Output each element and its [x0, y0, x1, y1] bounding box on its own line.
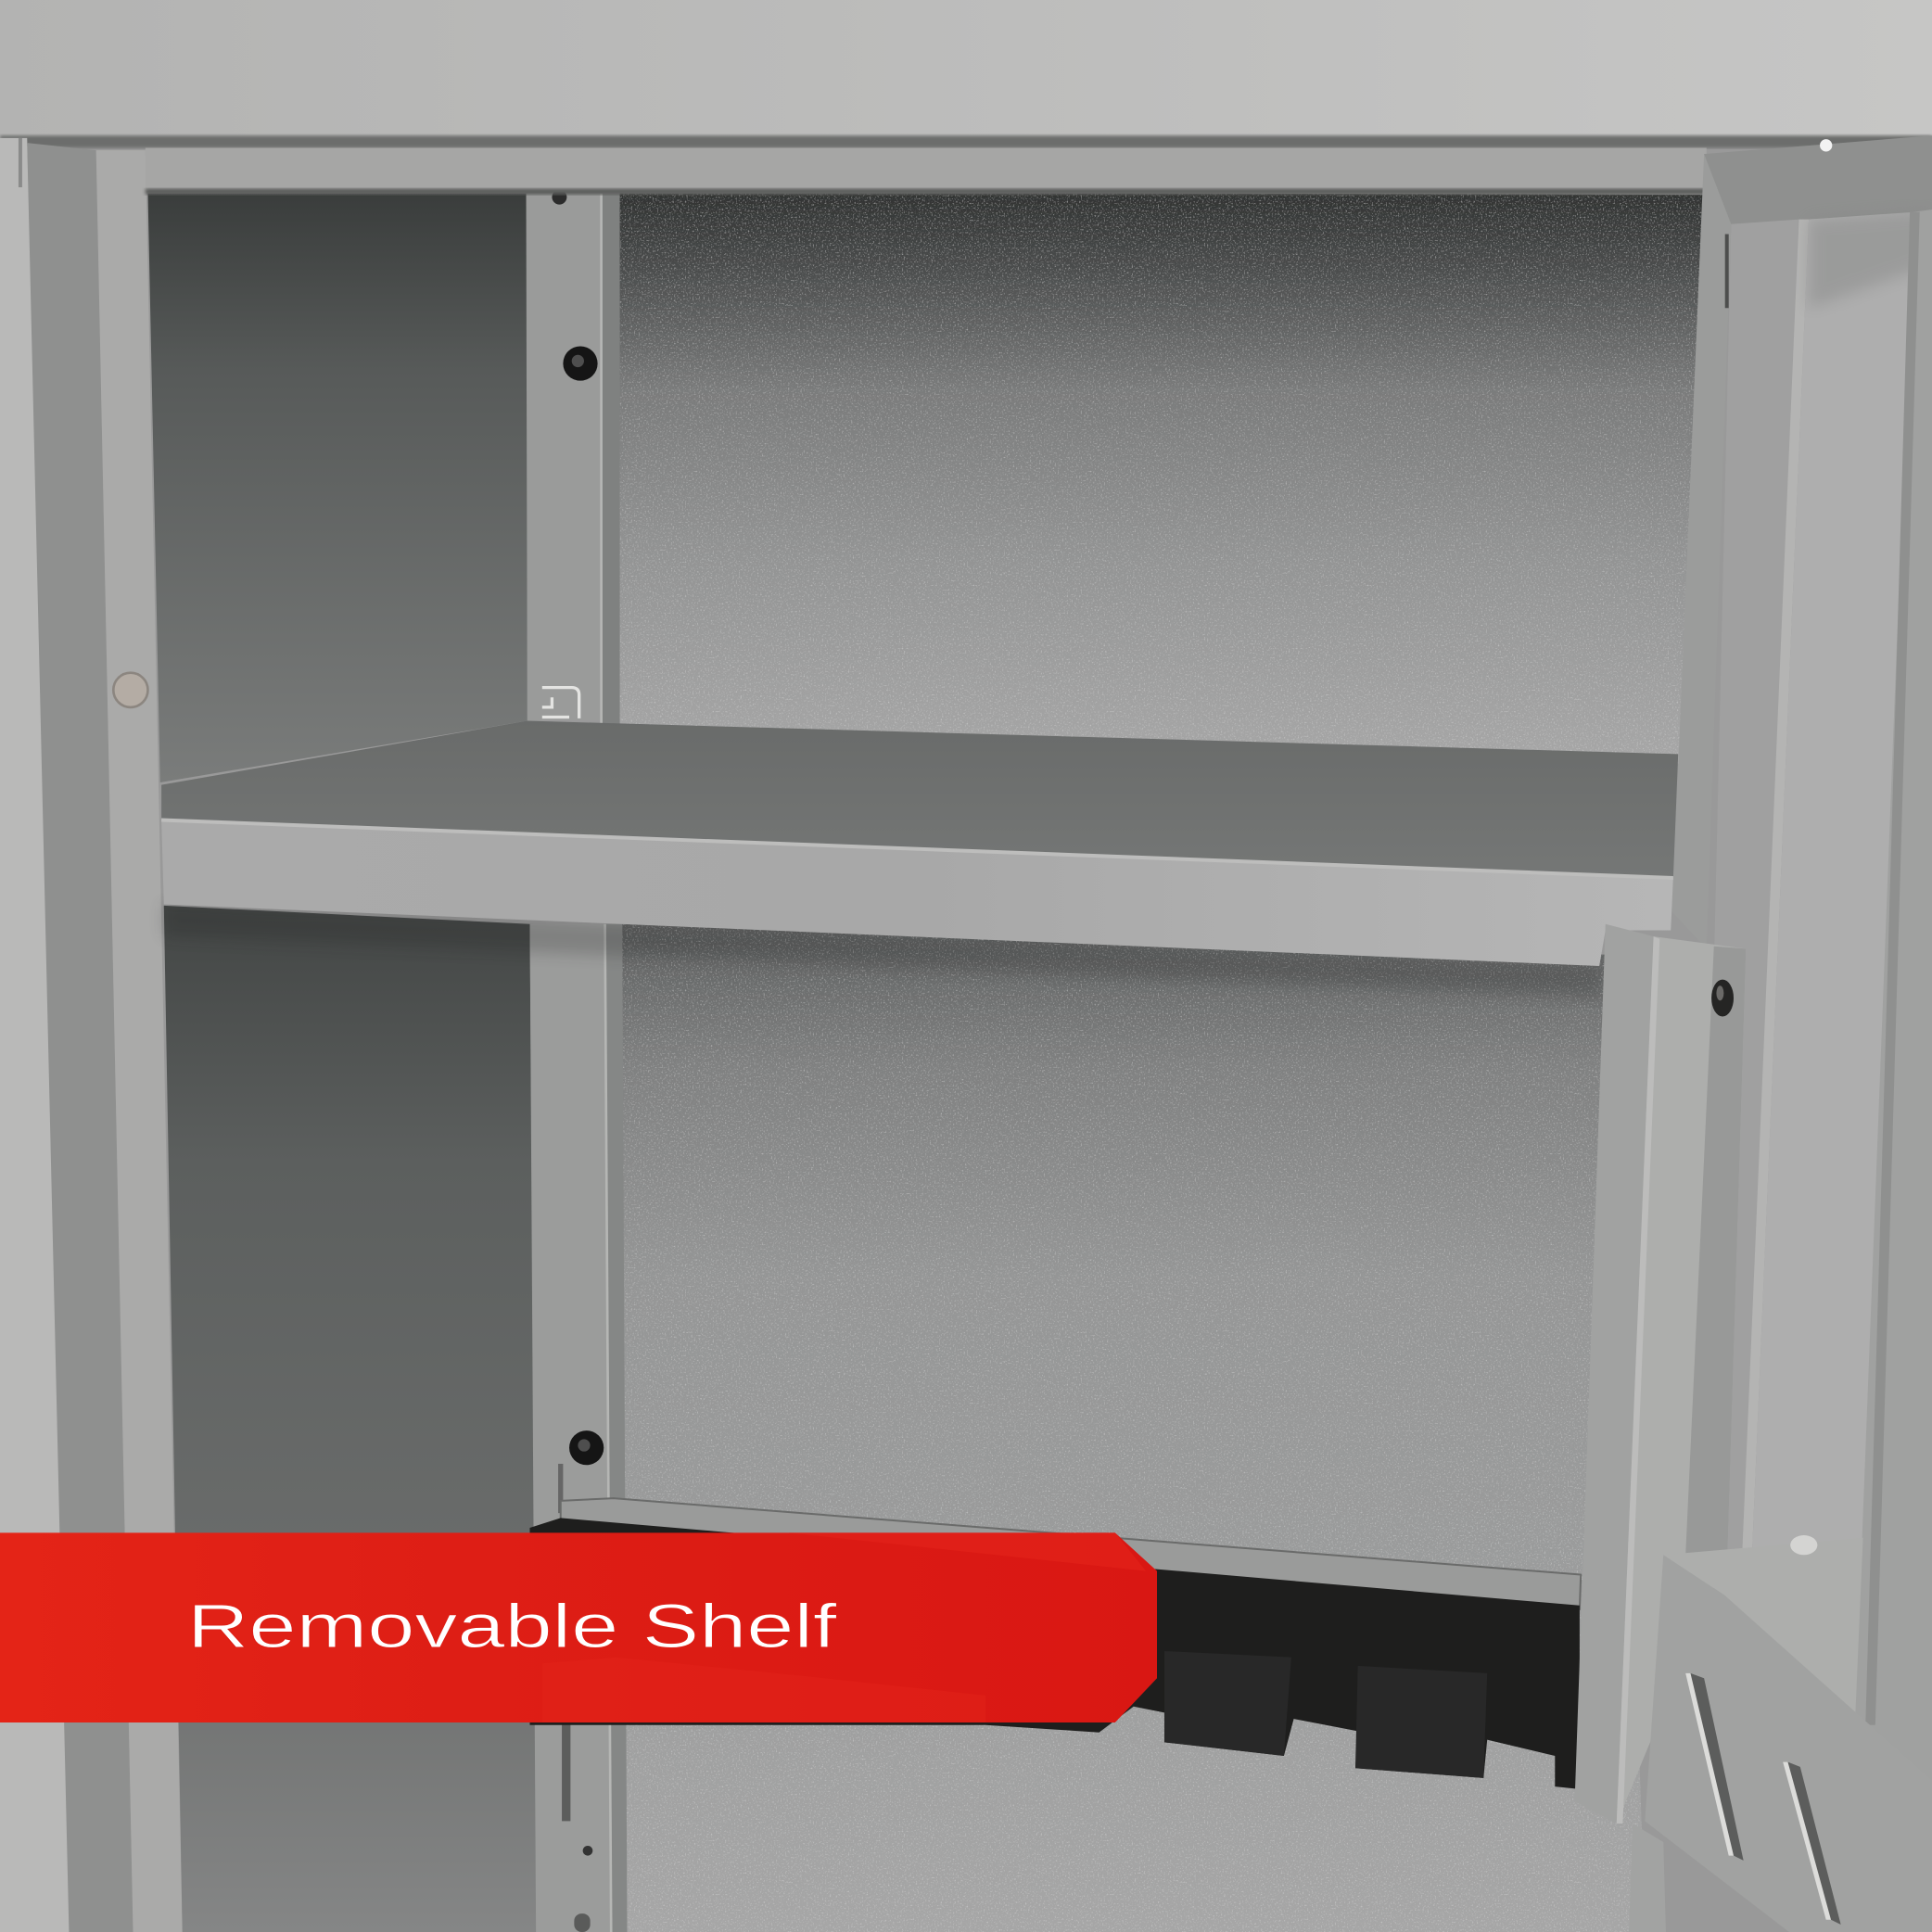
banner label: Removable Shelf: [187, 1593, 837, 1661]
door top header: [1704, 135, 1932, 224]
open door: [1672, 135, 1932, 1799]
left door frame: [0, 138, 183, 1932]
door pocket bracket: [1629, 1535, 1932, 1932]
shelf top surface: [161, 721, 1678, 877]
upright strip upper: [527, 190, 620, 727]
foam gun rest: [530, 1518, 1580, 1789]
door inner panel: [1752, 212, 1916, 1553]
banner shape: [0, 1532, 1157, 1722]
pocket slot one: [1685, 1673, 1744, 1861]
upright strip lower: [530, 924, 628, 1932]
top beam: [146, 147, 1707, 195]
top cabinet panel: [0, 0, 1932, 147]
removable shelf: [161, 721, 1678, 998]
left inner wall upper: [147, 194, 527, 782]
pocket slot two: [1783, 1762, 1841, 1925]
shelf shadow on walls: [164, 903, 1602, 998]
icon: screw lower: [569, 1430, 604, 1465]
shelf front lip: [161, 820, 1673, 966]
icon: hinge highlight: [1820, 139, 1832, 151]
door hinge bracket: [1575, 924, 1746, 1824]
back panel lower: [622, 924, 1645, 1932]
icon: door screw: [1711, 980, 1734, 1016]
icon: rivet on frame: [113, 673, 147, 707]
icon: screw upper: [563, 346, 598, 381]
callout banner: [0, 1532, 1157, 1722]
door outer stripe: [1854, 210, 1932, 1799]
left inner wall lower: [164, 906, 537, 1932]
icon: shelf hook slot: [542, 688, 579, 718]
door side edge: [1672, 154, 1731, 948]
bottom rail: [561, 1498, 1581, 1609]
icon: door pin: [1790, 1535, 1817, 1555]
back panel upper: [620, 194, 1707, 764]
door inner flange: [1700, 220, 1799, 1553]
